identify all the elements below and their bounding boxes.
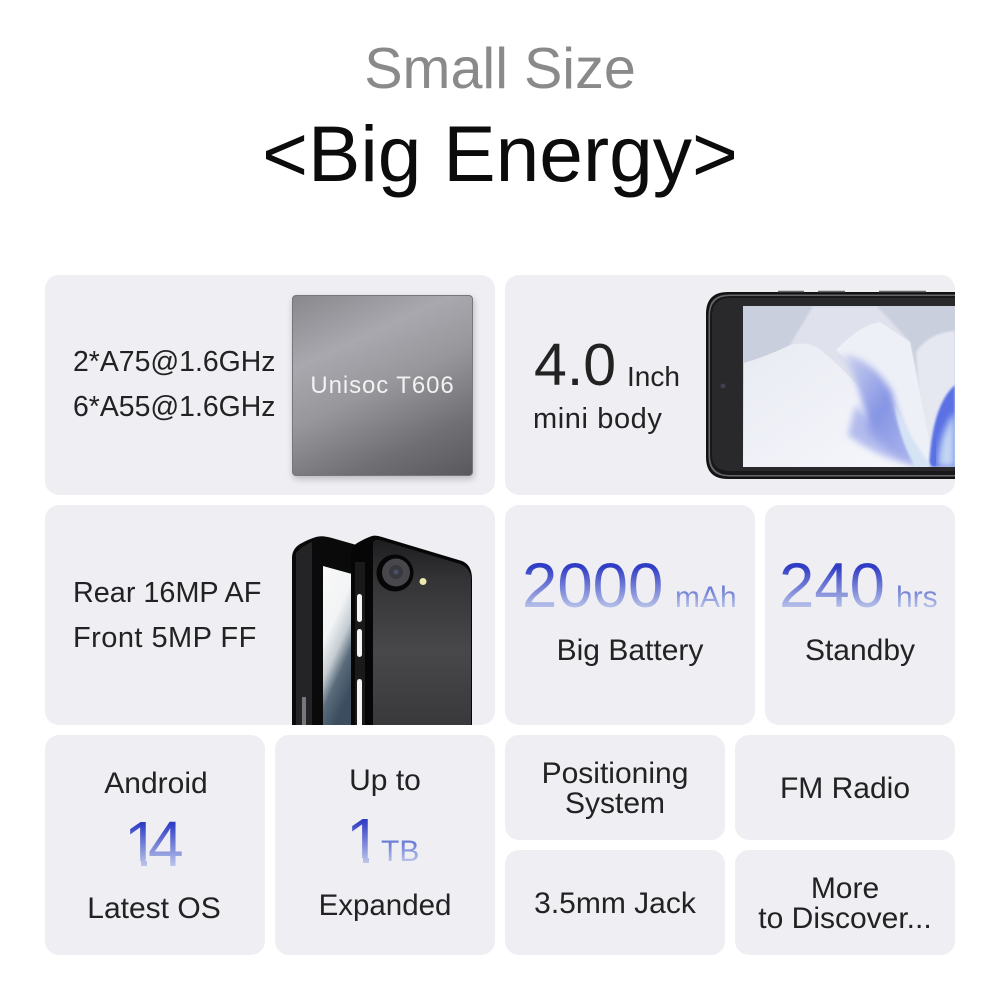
stat: 1 — [352, 819, 369, 863]
stat: 14: 14 — [124, 808, 172, 880]
panel: standby — [765, 505, 955, 725]
stat: 240: 240 — [779, 551, 885, 621]
panel: battery — [505, 505, 755, 725]
stat unit: mAh: mAh — [675, 581, 737, 614]
title: Small Size: Small Size — [364, 37, 636, 101]
text: FM Radio: FM Radio — [780, 772, 910, 805]
icon: Unisoc T606 chip: Unisoc T606 — [310, 372, 455, 399]
text: mini body: mini body — [533, 403, 663, 435]
text: More to Discover: to Discover... — [758, 902, 932, 935]
panel: positioning — [505, 735, 725, 840]
text: Positioning System — [542, 757, 688, 820]
text: front camera: Front 5MP FF — [73, 622, 257, 654]
panel: processor — [45, 275, 495, 495]
panel: headphone jack — [505, 850, 725, 955]
text: A55 cores: 6*A55@1.6GHz — [73, 391, 275, 423]
text: Positioning System: Positioning — [542, 757, 688, 790]
text: Up to: Up to — [349, 764, 421, 797]
text: Big Battery: Big Battery — [557, 634, 703, 667]
text: Positioning System: System — [565, 787, 665, 820]
icon: Unisoc T606 chip — [292, 295, 473, 476]
text: A75 cores: 2*A75@1.6GHz — [73, 346, 275, 378]
stat: 14 — [130, 822, 182, 866]
image: phone front view — [706, 290, 955, 479]
text: More to Discover — [758, 872, 932, 935]
text: rear camera: Rear 16MP AF — [73, 577, 261, 609]
panel: operating system — [45, 735, 265, 955]
stat unit: hrs: hrs — [896, 581, 938, 614]
text: Expanded: Expanded — [319, 889, 451, 922]
panel: cameras — [45, 505, 495, 725]
text: 3.5mm Jack: 3.5mm Jack — [534, 887, 696, 920]
title: Big Energy: <Big Energy> — [262, 110, 738, 198]
panel: FM radio — [735, 735, 955, 840]
stat: 2000: 2000 — [522, 551, 663, 621]
text: Standby: Standby — [805, 634, 915, 667]
panel: more features — [735, 850, 955, 955]
image: phone rear and side view — [292, 536, 472, 725]
panel: storage — [275, 735, 495, 955]
stat: 1: 1 — [346, 805, 382, 877]
text: More to Discover: More — [811, 872, 879, 905]
text: Latest OS: Latest OS — [87, 892, 221, 925]
stat unit: TB: TB — [381, 835, 419, 868]
text: 4.0: 4.0 — [534, 332, 616, 398]
text: Inch: Inch — [627, 361, 680, 392]
panel: display size — [505, 275, 955, 495]
text: Android: Android — [104, 767, 208, 800]
